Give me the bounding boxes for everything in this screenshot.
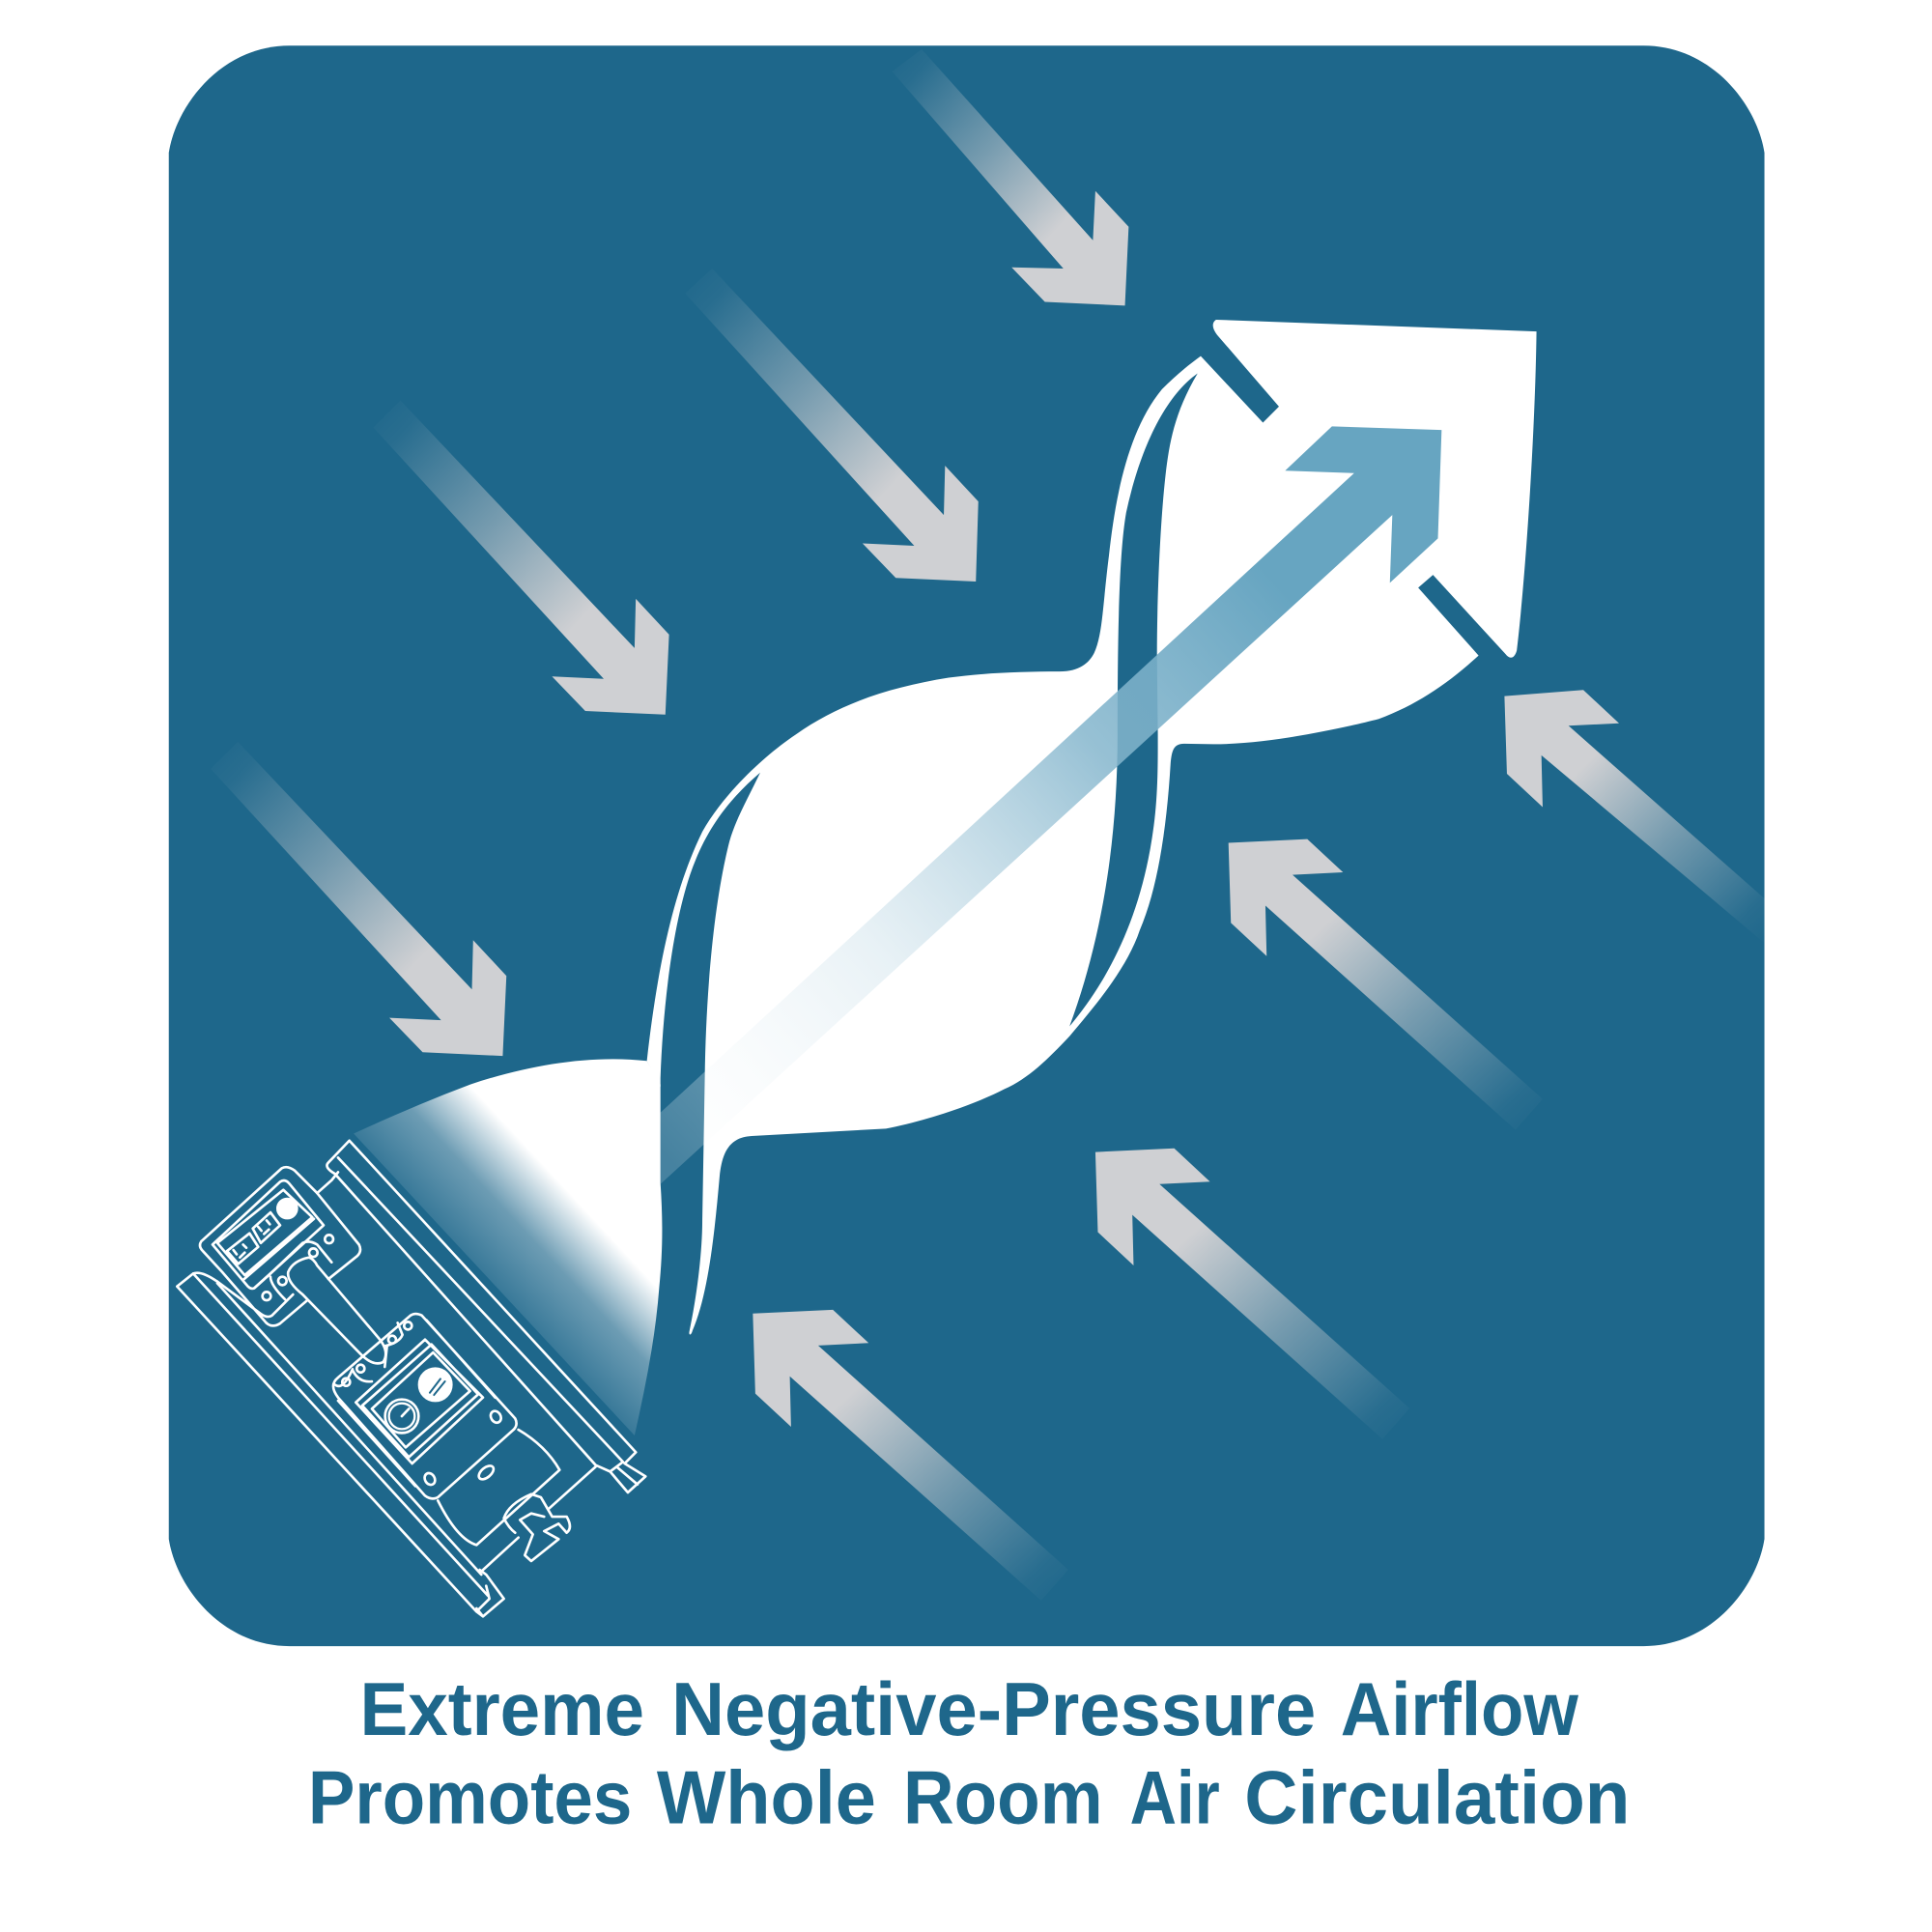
display unit bbox=[200, 1167, 385, 1363]
infographic: negative-pressure airflow bbox=[168, 45, 1765, 1824]
display holes bbox=[263, 1235, 333, 1300]
frame cross bars bbox=[317, 1172, 596, 1572]
dark gap between the helix strands bbox=[1069, 373, 1198, 1026]
title text: Circulation bbox=[1244, 1757, 1630, 1840]
display plate bbox=[200, 1167, 360, 1325]
airflow twist: white helix bbox=[354, 320, 1537, 1435]
plate holes bbox=[342, 1321, 503, 1487]
motor housing bbox=[438, 1430, 559, 1545]
handle bbox=[288, 1258, 385, 1363]
arrow: inflow 4 bbox=[211, 742, 506, 1056]
speed switch bbox=[419, 1369, 451, 1401]
outlets bbox=[227, 1212, 280, 1264]
title text: Whole bbox=[657, 1757, 876, 1840]
arrows: inflow from upper left bbox=[211, 49, 1128, 1056]
title text: Negative-Pressure bbox=[671, 1668, 1316, 1751]
arrow: inflow 8 bbox=[753, 1310, 1068, 1601]
title text: Extreme bbox=[359, 1668, 644, 1751]
plate curves bbox=[335, 1322, 403, 1386]
icon: air mover unit line drawing bbox=[177, 1141, 645, 1616]
fan of air leaving the unit bbox=[354, 1059, 662, 1435]
title text: Air bbox=[1130, 1757, 1220, 1840]
arrow: inflow 6 bbox=[1229, 839, 1543, 1130]
wing nut bbox=[504, 1494, 570, 1561]
title text bbox=[308, 1668, 1630, 1840]
title text: Promotes bbox=[308, 1757, 632, 1840]
panel: blue background bbox=[169, 45, 1765, 1646]
arrow: inflow 3 bbox=[373, 401, 669, 715]
upper rail bbox=[327, 1141, 645, 1492]
control panel bbox=[355, 1340, 483, 1463]
dial bbox=[277, 1199, 297, 1218]
motor vent bbox=[476, 1463, 496, 1482]
title text: Airflow bbox=[1341, 1668, 1578, 1751]
lower rail bbox=[177, 1273, 504, 1616]
helix body with arrow head bbox=[647, 320, 1537, 1335]
arrow: inflow 2 bbox=[685, 269, 979, 582]
arrow: inflow 1 bbox=[892, 49, 1128, 305]
arrows: inflow from lower right bbox=[753, 690, 1767, 1601]
arrow: main outflow through the helix bbox=[661, 426, 1441, 1184]
arrow: inflow 7 bbox=[1095, 1149, 1409, 1439]
display screen bbox=[213, 1180, 324, 1289]
control plate body bbox=[333, 1314, 517, 1498]
power switch bbox=[385, 1400, 418, 1433]
title text: Room bbox=[903, 1757, 1103, 1840]
arrow: inflow 5 bbox=[1504, 690, 1767, 945]
